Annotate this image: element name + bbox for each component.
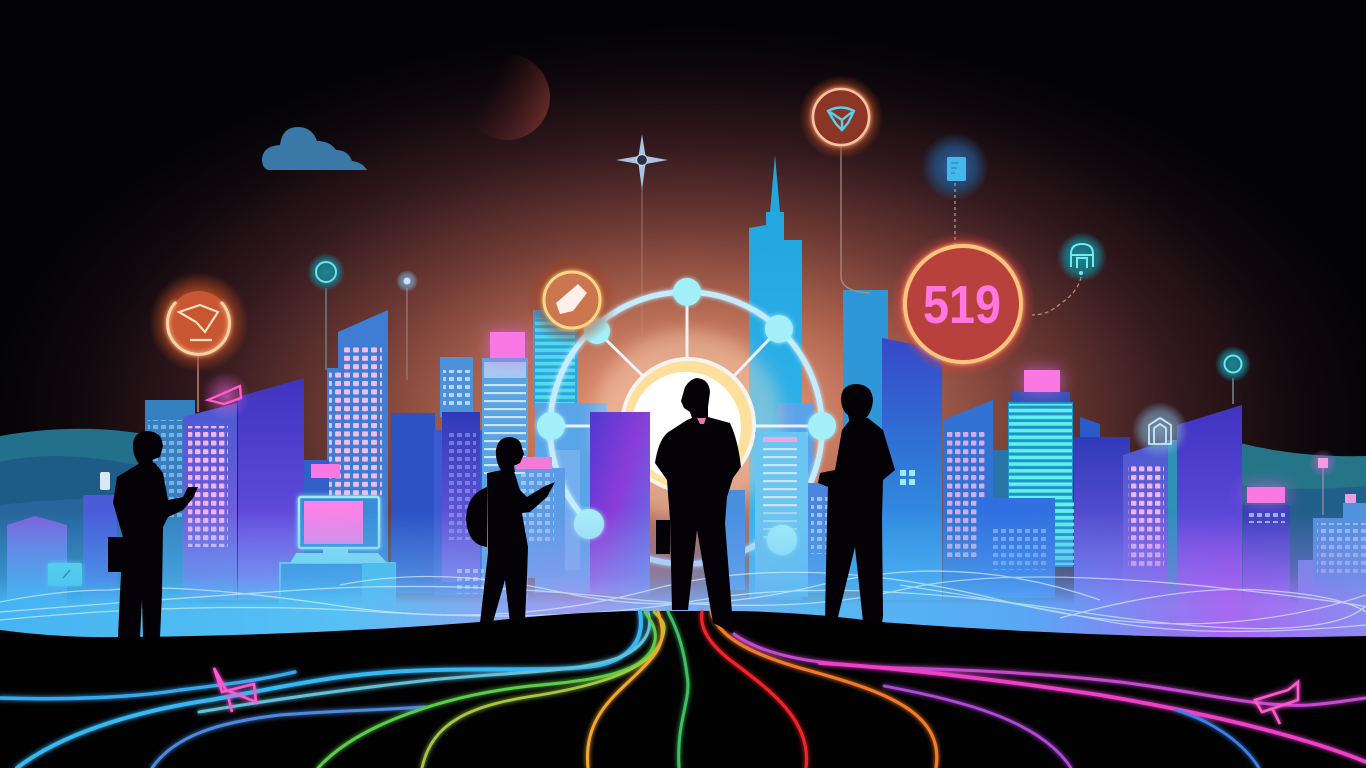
cloud: [262, 127, 367, 170]
ground: [0, 611, 1366, 768]
skyline: right buildings: [943, 392, 1366, 612]
small house: [7, 516, 67, 610]
network wheel: ring, spokes and core: [550, 292, 822, 564]
ground neon markers: [214, 668, 1298, 724]
silhouette: person with backpack: [466, 437, 555, 623]
skyline: central towers: [533, 155, 888, 600]
neon icon: cyan lock: [1032, 232, 1107, 315]
neon icon: right cyan pin: [1215, 346, 1251, 404]
neon icon: top orange badge: [799, 75, 883, 293]
skyline: left buildings: [7, 310, 528, 610]
neon number badge 519: [891, 232, 1035, 376]
moon: [464, 54, 550, 140]
silhouette: central man in suit: [655, 378, 741, 633]
small left icons: [48, 472, 484, 594]
compass star: [616, 134, 668, 338]
neon number badge 519: 519: [923, 275, 1001, 335]
neon icon: right pink lantern: [1309, 449, 1337, 515]
wavy luminous ground lines: [0, 571, 1366, 631]
neon icon: orange tag badge: [526, 254, 618, 346]
glowing pink rooftops: [311, 330, 1287, 505]
computer on desk: [280, 497, 395, 610]
neon icon: left orange badge: [149, 272, 249, 412]
network nodes: [537, 278, 836, 555]
silhouette: person with briefcase, left: [108, 431, 198, 638]
neon icon: left small cyan pins: [307, 253, 418, 380]
neon icon: fingerprint shield: [1132, 402, 1188, 458]
neon icon: pink roof marker: [202, 372, 250, 420]
glowing road lines: [0, 612, 1366, 768]
skyline: buildings in front of wheel: [516, 338, 942, 600]
distant hills: [0, 428, 1366, 640]
lit window cluster: [900, 470, 915, 485]
bright luminous floor fade: [0, 515, 1366, 638]
neon icon: blue document: [921, 133, 989, 245]
silhouette: man on right: [818, 384, 895, 623]
